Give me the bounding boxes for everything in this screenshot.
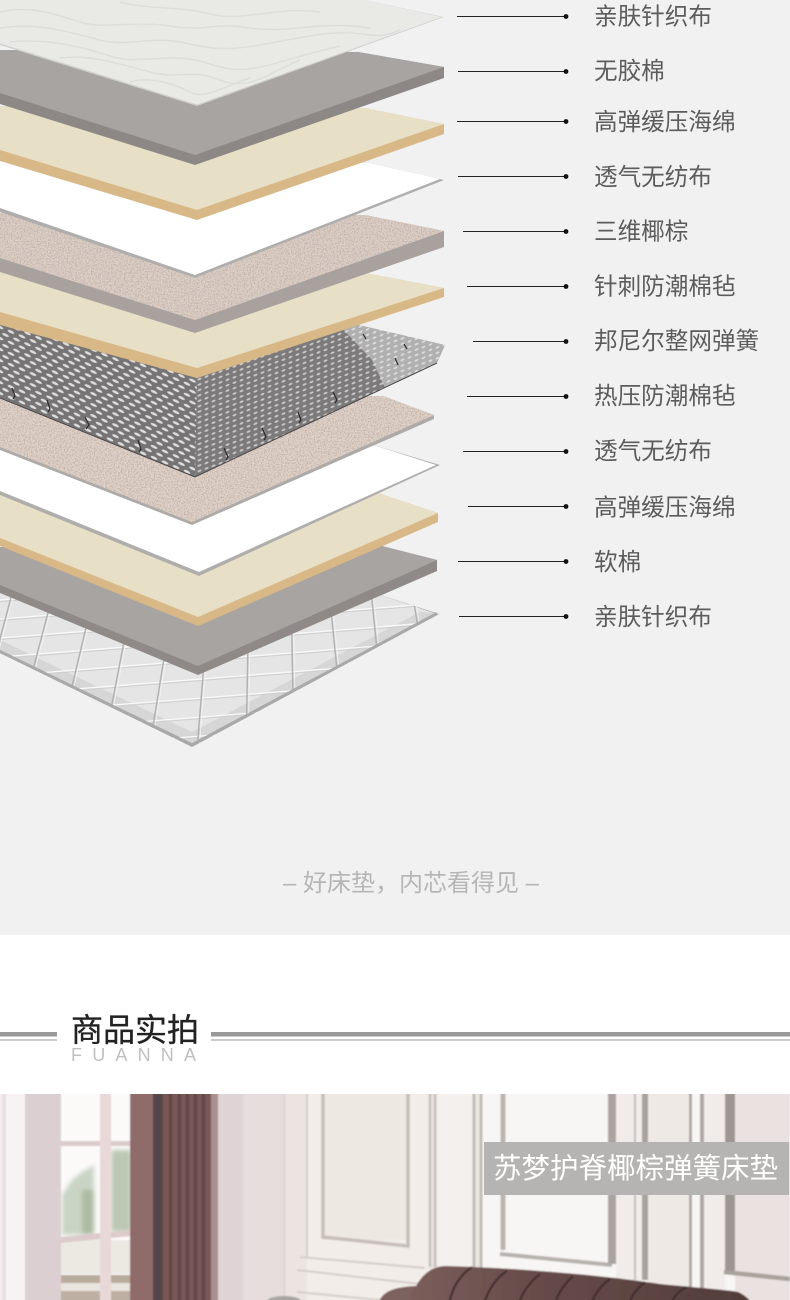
- label: 无胶棉: 无胶棉: [594, 58, 665, 85]
- label: 热压防潮棉毡: 热压防潮棉毡: [594, 383, 736, 410]
- lamp top: [267, 1296, 301, 1300]
- label: 亲肤针织布: [459, 604, 712, 631]
- label: 高弹缓压海绵: [457, 109, 736, 136]
- leather sofa: [378, 1266, 752, 1300]
- caption: – 好床垫，内芯看得见 –: [283, 870, 540, 897]
- section heading: 商品实拍: FUANNA: [71, 1045, 206, 1065]
- label: 高弹缓压海绵: [468, 494, 736, 522]
- section heading: 商品实拍: [0, 1012, 790, 1065]
- label: 亲肤针织布: [457, 4, 712, 30]
- label: 针刺防潮棉毡: [467, 274, 736, 300]
- label: 软棉: 软棉: [594, 549, 641, 576]
- label: 亲肤针织布: 亲肤针织布: [594, 4, 712, 30]
- label: 邦尼尔整网弹簧: 邦尼尔整网弹簧: [594, 328, 759, 355]
- panel: mattress structure background: [0, 0, 790, 935]
- layer 7: bonnell spring mesh: [0, 320, 445, 477]
- section heading: 商品实拍: 商品实拍: [71, 1012, 199, 1048]
- label: 邦尼尔整网弹簧: [473, 328, 759, 355]
- layer 12: quilted knit fabric: [0, 593, 439, 747]
- label: 透气无纺布: [463, 438, 712, 465]
- layer 11: soft cotton: [0, 545, 437, 675]
- label: 三维椰棕: [463, 218, 688, 246]
- label: 无胶棉: [458, 58, 665, 85]
- layer 3: high resilience foam: [0, 106, 444, 220]
- curtain: [130, 1090, 218, 1300]
- layer 10: high resilience foam: [0, 493, 438, 626]
- wall panels: [285, 1090, 435, 1300]
- label: 热压防潮棉毡: [467, 383, 736, 410]
- layer 4: breathable non-woven: [0, 160, 444, 278]
- layer 6: needled moisture-proof felt: [0, 272, 444, 378]
- product name banner: 苏梦护脊椰棕弹簧床垫: [493, 1153, 778, 1185]
- product name banner: [484, 1142, 789, 1195]
- layer 5: 3D coconut palm: [0, 213, 444, 333]
- layer 2: glue-free cotton: [0, 50, 444, 165]
- label: 高弹缓压海绵: 高弹缓压海绵: [594, 494, 736, 522]
- label: 软棉: [458, 549, 641, 576]
- label: 透气无纺布: 透气无纺布: [594, 438, 712, 465]
- layer 9: non-woven fabric: [0, 445, 440, 576]
- label: 透气无纺布: 透气无纺布: [594, 164, 712, 191]
- label: 针刺防潮棉毡: 针刺防潮棉毡: [594, 274, 736, 300]
- label: 三维椰棕: 三维椰棕: [594, 218, 688, 246]
- layer 1: skin-friendly knit: [0, 0, 444, 106]
- window with garden view: [61, 1090, 132, 1300]
- product photo: bedroom with leather sofa: [0, 1090, 790, 1300]
- label: 高弹缓压海绵: 高弹缓压海绵: [594, 109, 736, 136]
- label: 亲肤针织布: 亲肤针织布: [594, 604, 712, 631]
- layer 8: hot pressed felt: [0, 395, 434, 525]
- door panels: [472, 1090, 790, 1300]
- leader lines and labels: [457, 4, 759, 631]
- label: 透气无纺布: [458, 164, 712, 191]
